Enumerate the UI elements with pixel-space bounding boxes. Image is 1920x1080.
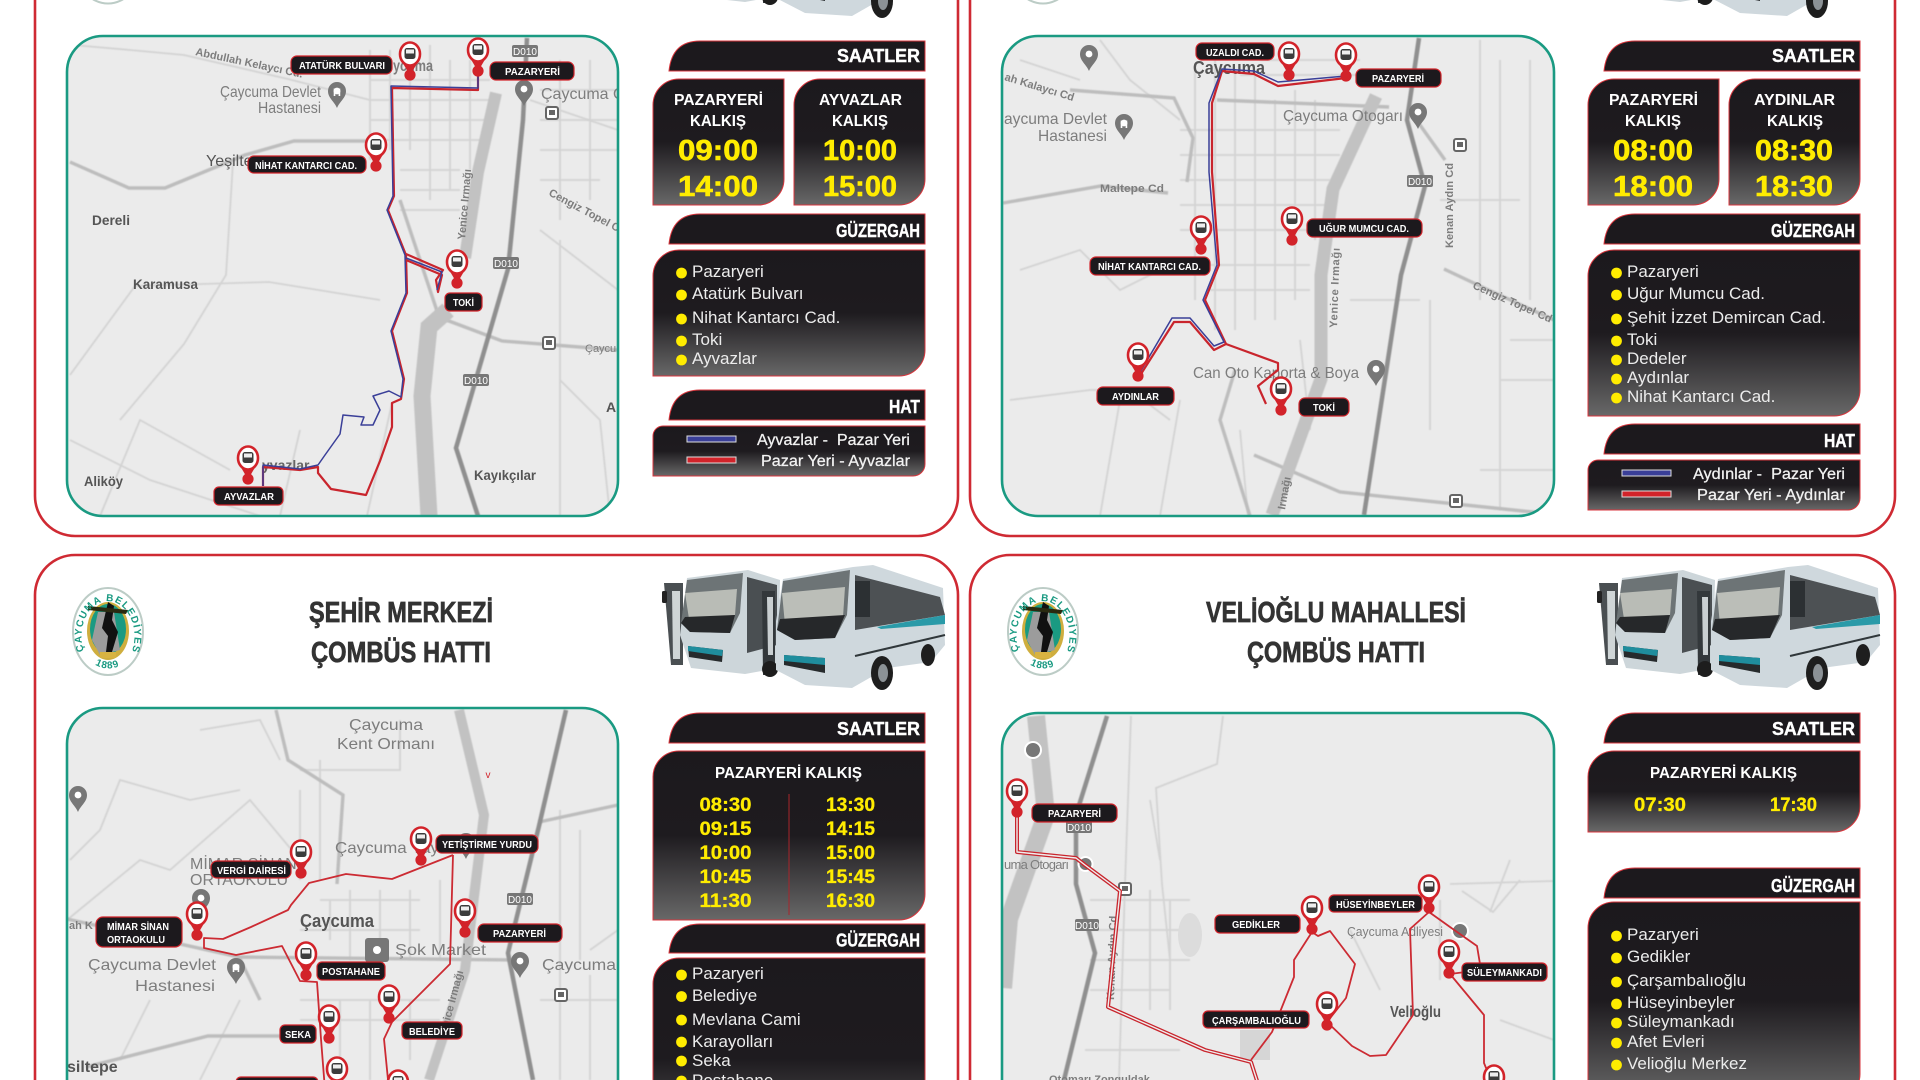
route list: Hüseyinbeyler (1627, 993, 1735, 1012)
map place labels: ycuma (393, 58, 433, 75)
route list (653, 250, 925, 376)
route list (1588, 250, 1860, 416)
route list: Pazaryeri (692, 262, 764, 281)
bus photo (662, 565, 945, 690)
stops: BELEDİYE (409, 1025, 455, 1038)
header: saatler (1604, 713, 1860, 743)
map place labels: Çaycu (585, 343, 616, 355)
map: Aydınlar route (1002, 36, 1554, 516)
panel: Şehir Merkezi line (34, 554, 960, 1080)
header: güzergah (669, 214, 925, 244)
stops (96, 828, 562, 1080)
map place labels: ORTAOKULU (190, 872, 288, 889)
legend: Pazar Yeri - Aydınlar (1697, 487, 1845, 504)
times: Ayvazlar: 10:00 (823, 135, 897, 167)
title: ÇOMBÜS HATTI (1247, 636, 1425, 669)
map place labels: Hastanesi (258, 100, 321, 117)
route list: Toki (692, 330, 722, 349)
map frame (1002, 713, 1554, 1080)
route list: Mevlana Cami (692, 1010, 801, 1029)
stops: PAZARYERİ (493, 927, 546, 940)
map place labels: Kayıkçılar (474, 467, 537, 483)
times: Ayvazlar: AYVAZLAR (819, 92, 902, 109)
stops (1007, 780, 1547, 1080)
title: ÇOMBÜS HATTI (311, 636, 491, 669)
times table (1588, 751, 1860, 832)
times table (653, 751, 925, 920)
schedule column (1588, 41, 1860, 510)
map place labels: Şok Market (395, 942, 487, 959)
route: city loop (204, 855, 453, 1080)
header: hat (1604, 424, 1860, 454)
times: Pazaryeri: 09:00 (678, 135, 758, 167)
map place labels: aycuma Devlet (1004, 111, 1108, 128)
header: güzergah: GÜZERGAH (836, 930, 920, 950)
header: güzergah: GÜZERGAH (1771, 876, 1855, 896)
times: Pazaryeri: PAZARYERİ (1609, 91, 1698, 109)
route: Toki branch (1226, 344, 1278, 404)
stops: YETİŞTİRME YURDU (442, 838, 532, 851)
header: saatler (669, 713, 925, 743)
route: east branch (384, 855, 453, 1080)
map place labels: Yenice Irmağı (436, 969, 466, 1041)
times: Aydınlar: 08:30 (1755, 135, 1833, 167)
map place labels (1004, 742, 1468, 1080)
panel: Aydınlar line (970, 0, 1895, 536)
map place labels: Yenice Irmağı (456, 169, 474, 240)
panel: Ayvazlar line (35, 0, 958, 536)
route list: Pazaryeri (692, 964, 764, 983)
map place labels: Irmağı (1276, 476, 1294, 511)
times: Aydınlar (1729, 79, 1860, 205)
route list: Afet Evleri (1627, 1032, 1704, 1051)
logo fragment (73, 0, 143, 4)
times: Pazaryeri (653, 79, 784, 205)
times: Ayvazlar: KALKIŞ (832, 113, 888, 130)
map place labels: Çaycuma Ot (541, 86, 630, 103)
times table: 11:30 (700, 891, 752, 912)
map: city centre route (67, 708, 618, 1080)
map place labels: Yeşilte (206, 153, 253, 170)
map place labels: Çaycuma (1193, 58, 1266, 78)
route list: Aydınlar (1627, 368, 1689, 387)
route list: Velioğlu Merkez (1627, 1054, 1747, 1073)
map place labels: Hastanesi (1038, 128, 1107, 145)
stops: ATATÜRK BULVARI (299, 59, 385, 72)
map place labels: Hastanesi (135, 978, 215, 995)
legend: Aydınlar - Pazar Yeri (1693, 466, 1845, 483)
map place labels: Al (606, 399, 620, 415)
map place labels: ah K (69, 920, 93, 932)
stops (1090, 42, 1441, 416)
map place labels: D010 (1408, 177, 1432, 188)
map place labels: Kent Ormanı (337, 736, 435, 753)
times table: 10:00 (700, 843, 752, 864)
map place labels: siltepe (67, 1059, 118, 1076)
times table: 17:30 (1770, 795, 1817, 816)
map place labels: ah Kalaycı Cd (1003, 71, 1076, 104)
title (1206, 595, 1466, 669)
times table: PAZARYERİ KALKIŞ (1650, 764, 1797, 782)
route list: Pazaryeri (1627, 262, 1699, 281)
route list: Süleymankadı (1627, 1012, 1735, 1031)
bus photo (1597, 565, 1880, 690)
stops: GEDİKLER (1232, 918, 1281, 931)
route list: Uğur Mumcu Cad. (1627, 284, 1765, 303)
map place labels (1003, 45, 1554, 511)
route list: Belediye (692, 986, 757, 1005)
map place labels: Çaycuma Otogarı (1283, 108, 1403, 125)
map place labels (67, 717, 616, 1076)
bus photo (1597, 0, 1880, 18)
stops: SEKA (285, 1030, 311, 1041)
map place labels: Maltepe Cd (1100, 183, 1164, 195)
panel: Velioğlu line (968, 554, 1896, 1080)
stops: TOKİ (453, 296, 474, 309)
route list: Ayvazlar (692, 349, 757, 368)
map place labels: Çaycuma Devlet (220, 84, 321, 101)
route list: Seka (692, 1051, 731, 1070)
route list: Toki (1627, 330, 1657, 349)
route list (1588, 902, 1860, 1080)
times: Ayvazlar: 15:00 (823, 171, 897, 203)
map place labels (84, 45, 630, 489)
map place labels: Çaycuma Devlet (88, 957, 217, 974)
map place labels: D010 (1067, 823, 1091, 834)
times: Ayvazlar (794, 79, 925, 205)
header: saatler: SAATLER (1772, 46, 1855, 66)
map place labels: H (1120, 119, 1128, 131)
times: Pazaryeri: PAZARYERİ (674, 91, 763, 109)
map place labels: MİMAR SİNAN (190, 854, 297, 873)
map place labels: Velioğlu (1390, 1004, 1441, 1021)
map place labels: Karamusa (133, 276, 198, 292)
legend (1588, 460, 1860, 510)
bus photo (662, 0, 945, 18)
stops: VERGİ DAİRESİ (217, 864, 286, 877)
stops: PAZARYERİ (1048, 807, 1101, 820)
route list: Dedeler (1627, 349, 1687, 368)
times table: 15:00 (826, 843, 875, 864)
logo: Çaycuma Belediyesi: ÇAYCUMA BELEDİYESİ (74, 594, 142, 652)
times table: 13:30 (826, 795, 875, 816)
map frame (67, 36, 618, 516)
map place labels: D010 (513, 47, 537, 58)
stops: TOKİ (1313, 401, 1335, 414)
map place labels: v (486, 770, 490, 781)
stops: POSTAHANE (322, 967, 380, 978)
title (309, 597, 493, 669)
map place labels: D010 (508, 895, 532, 906)
map place labels: Çaycuma (300, 911, 375, 931)
map place labels: Abdullah Kelaycı Cd. (194, 46, 304, 81)
stops: UĞUR MUMCU CAD. (1319, 222, 1409, 235)
route: neighbourhood loop (1251, 912, 1493, 1080)
header: saatler: SAATLER (837, 719, 920, 739)
times table: 08:30 (700, 795, 752, 816)
route list: Şehit İzzet Demircan Cad. (1627, 308, 1826, 327)
route list: Çarşambalıoğlu (1627, 971, 1746, 990)
map place labels: D010 (464, 376, 488, 387)
map place labels: D010 (1075, 921, 1099, 932)
stops: AYVAZLAR (224, 492, 275, 503)
stops: ORTAOKULU (107, 935, 165, 946)
header: hat (669, 390, 925, 420)
times: Pazaryeri (1588, 79, 1719, 205)
map place labels: Dereli (92, 212, 130, 228)
times: Pazaryeri: 08:00 (1613, 135, 1693, 167)
legend: Pazar Yeri - Ayvazlar (761, 453, 910, 470)
route: main corridor (1017, 812, 1260, 1080)
title: VELİOĞLU MAHALLESİ (1206, 595, 1466, 629)
map place labels: Cengiz Topel Cd (1471, 280, 1554, 325)
stops: UZALDI CAD. (1206, 48, 1264, 59)
route list (653, 958, 925, 1080)
route list: Karayolları (692, 1032, 773, 1051)
route list: Gedikler (1627, 947, 1691, 966)
stops: ÇARŞAMBALIOĞLU (1212, 1014, 1301, 1027)
header: güzergah: GÜZERGAH (836, 221, 920, 241)
logo: Çaycuma Belediyesi: ÇAYCUMA BELEDİYESİ (1010, 594, 1077, 652)
map place labels: D010 (494, 259, 518, 270)
map place labels: Çaycuma Adliyesi (1347, 924, 1443, 939)
header: saatler (1604, 41, 1860, 71)
route list: Atatürk Bulvarı (692, 284, 804, 303)
times table: 16:30 (826, 891, 875, 912)
route: Aydınlar - Pazar Yeri (1139, 69, 1346, 374)
map place labels: Çaycuma Yay (335, 840, 439, 857)
stops: PAZARYERİ (505, 65, 560, 78)
times: Aydınlar: 18:30 (1755, 171, 1833, 203)
header: saatler (669, 41, 925, 71)
header: güzergah (1604, 868, 1860, 898)
route: Pazar Yeri - Aydınlar (1141, 71, 1346, 374)
stops: MİMAR SİNAN (107, 920, 169, 933)
map place labels: H (232, 963, 240, 975)
logo: Çaycuma Belediyesi (72, 587, 144, 676)
logo: Çaycuma Belediyesi: 1889 (1030, 660, 1053, 668)
stops: AYDINLAR (1112, 392, 1160, 403)
map frame (67, 708, 618, 1080)
times table: 15:45 (826, 867, 875, 888)
map place labels: Cengiz Topel Cd (547, 187, 628, 238)
times table: 14:15 (826, 819, 875, 840)
stops: NİHAT KANTARCI CAD. (255, 159, 357, 172)
route: Toki branch (406, 254, 443, 292)
header: güzergah: GÜZERGAH (1771, 221, 1855, 241)
header: güzergah (669, 924, 925, 953)
legend (653, 426, 925, 476)
header: hat: HAT (889, 397, 920, 417)
route list: Nihat Kantarcı Cad. (1627, 387, 1775, 406)
stops: PAZARYERİ (1372, 72, 1424, 85)
times: Pazaryeri: KALKIŞ (690, 113, 746, 130)
schedule column (653, 713, 925, 1080)
map place labels: uma Otogarı (1004, 857, 1069, 872)
logo: Çaycuma Belediyesi: 1889 (96, 660, 118, 668)
map place labels: Kenan Aydın Cd (1105, 916, 1120, 1000)
times table: 10:45 (700, 867, 752, 888)
schedule column (1588, 713, 1860, 1080)
legend: Ayvazlar - Pazar Yeri (757, 432, 910, 449)
map place labels: yvazlar (262, 457, 310, 473)
map: Ayvazlar route (67, 36, 630, 516)
times: Aydınlar: KALKIŞ (1767, 113, 1823, 130)
map place labels: H (333, 87, 341, 99)
map place labels: Can Oto Kaporta & Boya (1193, 365, 1359, 382)
header: saatler: SAATLER (1772, 719, 1855, 739)
header: hat: HAT (1824, 431, 1855, 451)
schedule column (653, 41, 925, 476)
header: güzergah (1604, 214, 1860, 244)
stops (214, 38, 574, 505)
title: ŞEHİR MERKEZİ (309, 597, 493, 629)
times: Pazaryeri: 18:00 (1613, 171, 1693, 203)
times table: 07:30 (1634, 795, 1686, 816)
times table: 09:15 (700, 819, 752, 840)
map place labels: Çaycuma (349, 717, 423, 734)
logo fragment (1008, 0, 1078, 4)
map: Velioğlu route (1002, 713, 1554, 1080)
route list: Pazaryeri (1627, 925, 1699, 944)
stops: SÜLEYMANKADI (1467, 966, 1542, 979)
route: Pazar Yeri - Ayvazlar (263, 72, 478, 495)
map place labels: Çaycuma (542, 957, 616, 974)
map place labels: Yenice Irmağı (1328, 248, 1343, 328)
times table: PAZARYERİ KALKIŞ (715, 764, 862, 782)
map frame (1002, 36, 1554, 516)
stops: HÜSEYİNBEYLER (1336, 898, 1416, 911)
stops: NİHAT KANTARCI CAD. (1098, 260, 1201, 273)
header: saatler: SAATLER (837, 46, 920, 66)
logo: Çaycuma Belediyesi (1007, 587, 1079, 676)
times: Pazaryeri: 14:00 (678, 171, 758, 203)
route: Ayvazlar - Pazar Yeri (263, 72, 478, 486)
times: Aydınlar: AYDINLAR (1754, 92, 1835, 109)
route list: Nihat Kantarcı Cad. (692, 308, 840, 327)
map place labels: Aliköy (84, 473, 123, 489)
map place labels: Kenan Aydın Cd (1444, 163, 1456, 248)
times: Pazaryeri: KALKIŞ (1625, 113, 1681, 130)
